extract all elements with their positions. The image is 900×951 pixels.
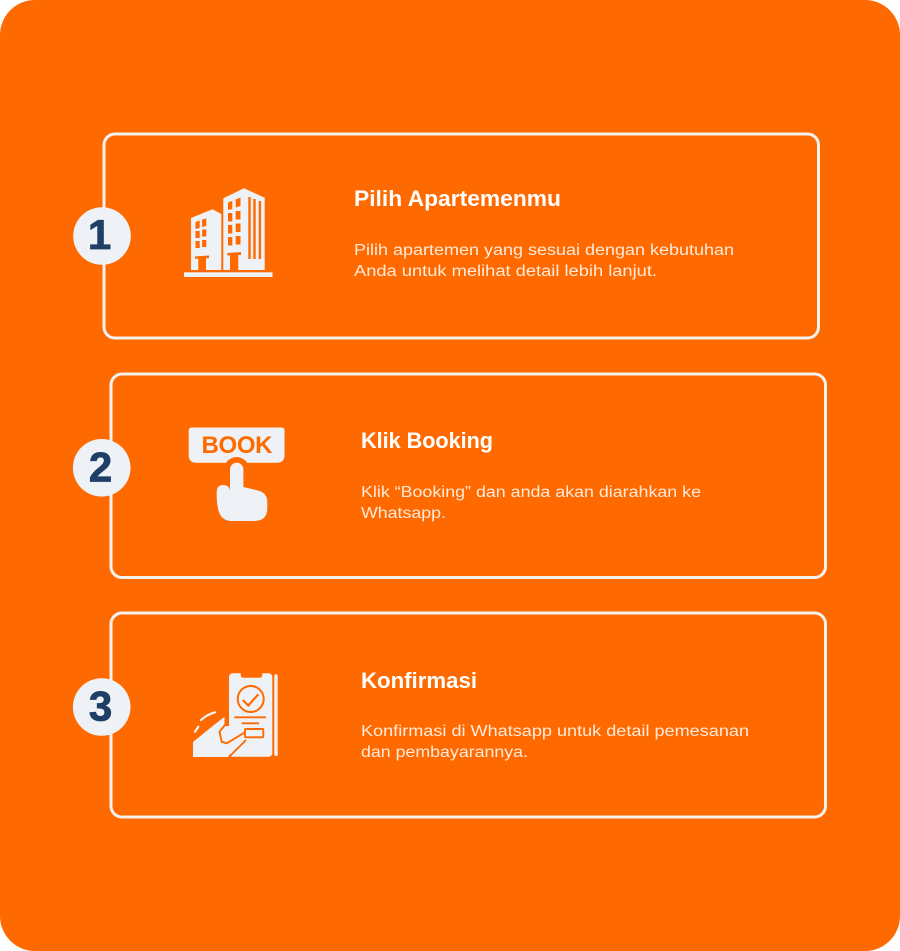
step 3 description: Konfirmasi di Whatsapp untuk detail pemesanan [361, 723, 749, 740]
icon: hand holding phone with check mark [193, 672, 278, 758]
step 2 description [361, 484, 701, 522]
step 3 number badge [73, 678, 130, 736]
panel: step 3 [73, 613, 825, 817]
panel: step 1 [73, 134, 818, 338]
step 3 heading: Konfirmasi [361, 668, 477, 693]
step 2 heading: Klik Booking [361, 428, 493, 453]
panel: step 2 [73, 374, 825, 578]
step 2 number badge: 2 [89, 444, 112, 490]
step 1 heading: Pilih Apartemenmu [354, 186, 561, 211]
step 2 description: Whatsapp. [361, 505, 446, 522]
step 3 description: dan pembayarannya. [361, 744, 528, 761]
step 3 number badge: 3 [89, 683, 112, 730]
step 1 description: Pilih apartemen yang sesuai dengan kebutuhan [354, 242, 734, 259]
icon: apartment buildings [184, 188, 272, 277]
step 1 description: Anda untuk melihat detail lebih lanjut. [354, 263, 657, 280]
step 3 description [361, 723, 749, 761]
step 2 number badge [73, 439, 130, 497]
step 2 description: Klik “Booking” dan anda akan diarahkan ke [361, 484, 701, 501]
icon: book button with pointing hand: BOOK [202, 432, 273, 459]
step 1 number badge: 1 [88, 211, 111, 258]
step 1 description [354, 242, 734, 280]
icon: book button with pointing hand [189, 428, 284, 521]
step 1 number badge [73, 207, 131, 265]
